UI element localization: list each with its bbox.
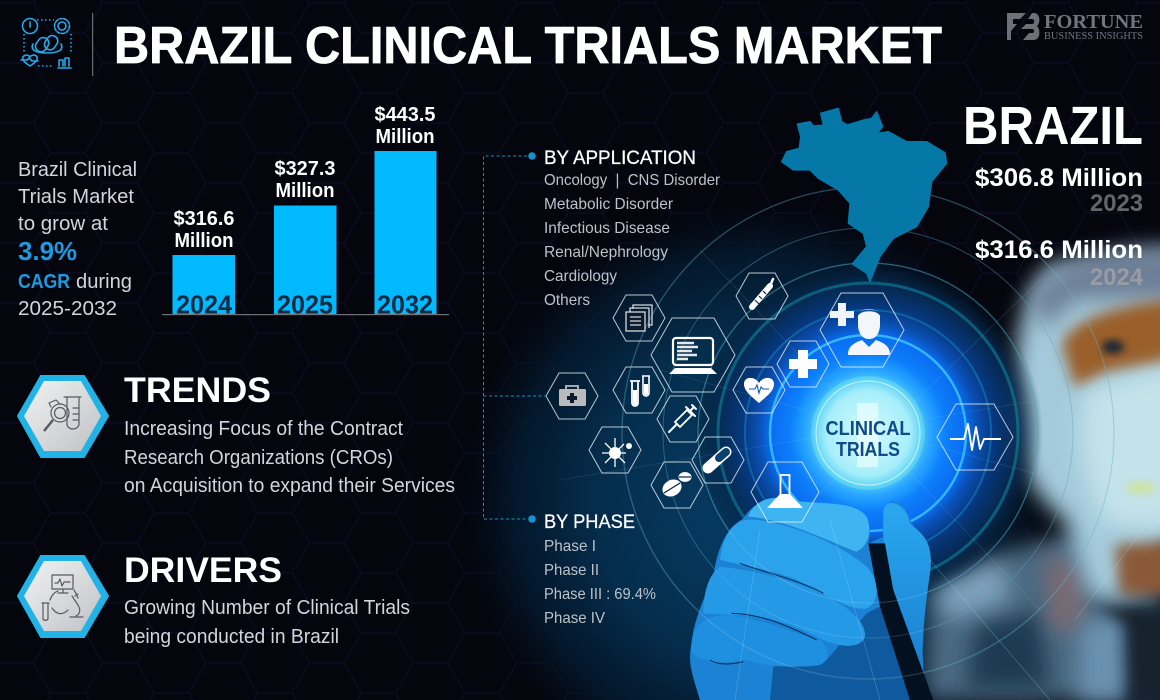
- CAGR text block: CAGR: [18, 271, 70, 293]
- hologram overlay on hand: [622, 187, 1160, 700]
- bar chart: $327.3: [274, 158, 336, 180]
- market values: Brazil: BRAZIL: [963, 96, 1143, 156]
- icon: flask hexagon: [751, 462, 819, 522]
- icon: computer hexagon: [651, 318, 735, 392]
- icon: plus hexagon: [777, 341, 829, 387]
- bar chart: 2025: [277, 290, 333, 320]
- icon: heart hexagon: [733, 367, 785, 413]
- panel: drivers: Growing Number of Clinical Trials: [124, 597, 410, 619]
- panel: trends: Research Organizations (CROs): [124, 447, 393, 469]
- segment list: by phase: Phase II: [544, 562, 599, 579]
- segment list: by phase: Phase III : 69.4%: [544, 586, 656, 603]
- central clinical trials hub: CLINICAL: [826, 417, 910, 440]
- market values: Brazil: 2023: [1090, 190, 1143, 217]
- bar chart: [162, 104, 449, 320]
- bar chart: 2032: [377, 290, 433, 320]
- CAGR text block: to grow at: [18, 213, 108, 235]
- icon: pills hexagon: [651, 462, 703, 508]
- logo: Fortune Business Insights: [1007, 11, 1143, 42]
- panel: trends: Increasing Focus of the Contract: [124, 418, 403, 440]
- market values: Brazil: $306.8 Million: [975, 164, 1143, 192]
- icon: test tubes hexagon: [613, 367, 665, 413]
- segment list: by application: Others: [544, 292, 590, 309]
- panel: trends: [18, 371, 455, 497]
- gloved hand holding stethoscope: [690, 498, 933, 700]
- central clinical trials hub: [808, 373, 928, 493]
- CAGR text block: Brazil Clinical: [18, 159, 137, 181]
- bar chart: $443.5: [374, 104, 436, 126]
- market values: Brazil: [963, 96, 1144, 291]
- market values: Brazil: 2024: [1090, 264, 1144, 291]
- segment list: by phase: [544, 512, 656, 627]
- segment list: by phase: BY PHASE: [544, 512, 635, 533]
- icon: doctor hexagon: [820, 293, 904, 367]
- hologram rings and glow: [560, 187, 1160, 679]
- header divider: [92, 13, 93, 76]
- panel: drivers: [18, 551, 410, 648]
- connector: dashed bracket: [484, 152, 547, 523]
- icon: virus hexagon: [589, 427, 641, 473]
- central clinical trials hub: TRIALS: [836, 438, 900, 461]
- segment list: by application: Renal/Nephrology: [544, 244, 668, 261]
- bar chart: $316.6: [174, 208, 234, 230]
- bar chart: 2024: [176, 290, 233, 320]
- segment list: by application: Infectious Disease: [544, 220, 670, 237]
- map: Brazil: [782, 108, 947, 282]
- panel: trends: TRENDS: [124, 371, 271, 410]
- icon: capsule hexagon: [692, 437, 744, 483]
- panel: trends: on Acquisition to expand their Services: [124, 475, 455, 497]
- CAGR text block: 2025-2032: [18, 298, 117, 320]
- CAGR text block: Trials Market: [18, 186, 134, 208]
- segment list: by application: BY APPLICATION: [544, 148, 696, 169]
- segment list: by phase: Phase I: [544, 538, 596, 555]
- bar chart: Million: [174, 230, 234, 252]
- logo: Fortune Business Insights: FORTUNE: [1044, 11, 1143, 33]
- market values: Brazil: $316.6 Million: [975, 236, 1143, 264]
- segment list: by application: Oncology | CNS Disorder: [544, 172, 721, 189]
- icon: first aid kit hexagon: [546, 373, 598, 419]
- CAGR text block: during: [76, 271, 132, 293]
- icon: pulse hexagon: [937, 404, 1013, 470]
- bar chart: Million: [276, 180, 334, 202]
- title: BRAZIL CLINICAL TRIALS MARKET: [114, 17, 942, 75]
- icon: syringe hexagon: [657, 396, 709, 442]
- icon: documents hexagon: [613, 295, 665, 341]
- icon: thermometer hexagon: [736, 273, 788, 319]
- segment list: by application: Cardiology: [544, 268, 617, 285]
- segment list: by phase: Phase IV: [544, 610, 605, 627]
- logo: Fortune Business Insights: BUSINESS INSIGHTS: [1044, 30, 1143, 42]
- segment list: by application: Metabolic Disorder: [544, 196, 674, 213]
- bar chart: Million: [376, 126, 434, 148]
- icon: clinical cycle logo: [21, 18, 71, 68]
- segment list: by application: [544, 148, 721, 309]
- panel: drivers: being conducted in Brazil: [124, 626, 339, 648]
- CAGR text block: 3.9%: [18, 236, 77, 266]
- photo: blurred doctor face and body: [925, 245, 1160, 700]
- CAGR text block: [18, 159, 137, 320]
- panel: drivers: DRIVERS: [124, 551, 282, 590]
